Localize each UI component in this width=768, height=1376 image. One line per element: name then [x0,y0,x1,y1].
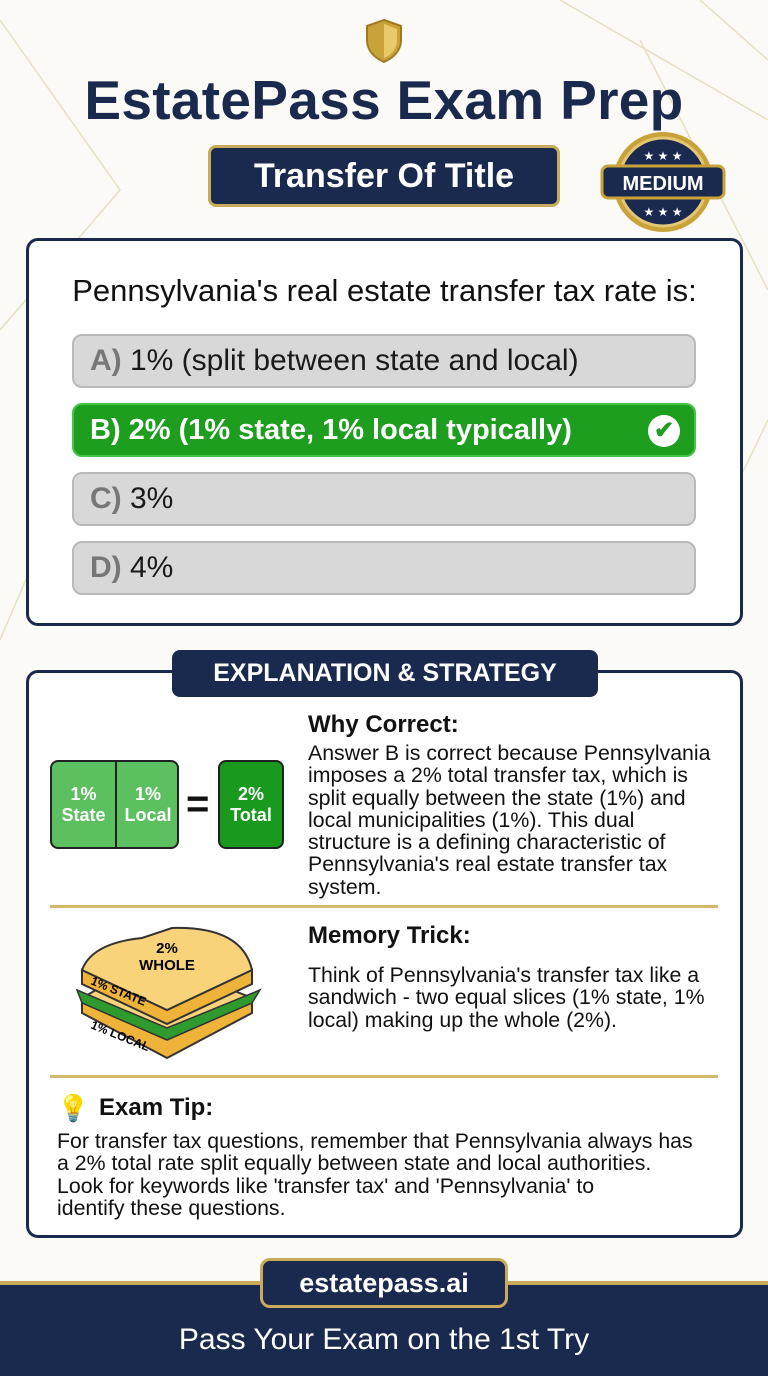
option D [72,541,696,595]
memory trick: sandwich - two equal slices (1% state, 1% [308,985,705,1009]
why correct: Pennsylvania's real estate transfer tax [308,852,667,876]
why correct: split equally between the state (1%) and [308,786,686,810]
option B correct [72,403,696,457]
exam tip: 💡 [57,1093,89,1123]
subtitle badge: Transfer Of Title [254,157,514,195]
panel: explanation [26,670,743,1238]
option A [72,334,696,388]
option A: A) 1% (split between state and local) [90,344,579,377]
footer url pill: estatepass.ai [299,1268,469,1298]
question text: Pennsylvania's real estate transfer tax rate is: [72,273,697,308]
why correct: system. [308,875,381,899]
footer url pill [260,1258,508,1308]
exam tip: identify these questions. [57,1196,286,1220]
exam tip: a 2% total rate split equally between state and local authorities. [57,1151,651,1175]
diagram: 1% + 1% = 2% [50,760,284,849]
why correct: Why Correct: [308,711,459,738]
memory trick [308,922,705,1032]
why correct [308,711,710,899]
difficulty badge: medium [600,132,726,232]
icon: sandwich [76,926,262,1060]
option B correct: ✔ [654,417,674,444]
option B correct: B) 2% (1% state, 1% local typically) [90,414,572,446]
diagram: 1% + 1% = 2%: 2% [238,784,264,804]
subtitle badge [208,145,560,207]
diagram: 1% + 1% = 2%: = [186,782,209,826]
memory trick: local) making up the whole (2%). [308,1008,617,1032]
exam tip: Exam Tip: [99,1094,213,1121]
panel: question [26,238,743,626]
diagram: 1% + 1% = 2%: 1% [135,784,161,804]
why correct: Answer B is correct because Pennsylvania [308,741,710,765]
footer [0,1281,768,1376]
memory trick: Memory Trick: [308,922,471,949]
explanation header [172,650,598,697]
tagline: Pass Your Exam on the 1st Try [179,1323,589,1356]
why correct: imposes a 2% total transfer tax, which is [308,763,688,787]
exam tip: For transfer tax questions, remember that Pennsylvania always has [57,1129,693,1153]
option D: D) 4% [90,551,173,584]
icon: sandwich: 2% [156,940,178,957]
option C: C) 3% [90,482,173,515]
explanation header: EXPLANATION & STRATEGY [213,659,557,687]
diagram: 1% + 1% = 2%: State [61,805,106,825]
diagram: 1% + 1% = 2%: Local [124,805,172,825]
diagram: 1% + 1% = 2%: Total [230,805,272,825]
difficulty badge: medium: ★ ★ ★ [644,149,682,163]
difficulty badge: medium: MEDIUM [622,173,704,195]
memory trick: Think of Pennsylvania's transfer tax like a [308,963,699,987]
icon: sandwich: 1% STATE [89,974,148,1009]
exam tip: Look for keywords like 'transfer tax' and 'Pennsylvania' to [57,1174,594,1198]
exam tip [57,1093,693,1220]
why correct: local municipalities (1%). This dual [308,808,634,832]
option C [72,472,696,526]
difficulty badge: medium: ★ ★ ★ [644,205,682,219]
icon: sandwich: 1% LOCAL [89,1018,152,1054]
why correct: structure is a defining characteristic of [308,830,665,854]
diagram: 1% + 1% = 2%: 1% [70,784,96,804]
icon: sandwich: WHOLE [139,957,195,974]
title: EstatePass Exam Prep [84,69,684,131]
icon: shield [366,19,402,64]
